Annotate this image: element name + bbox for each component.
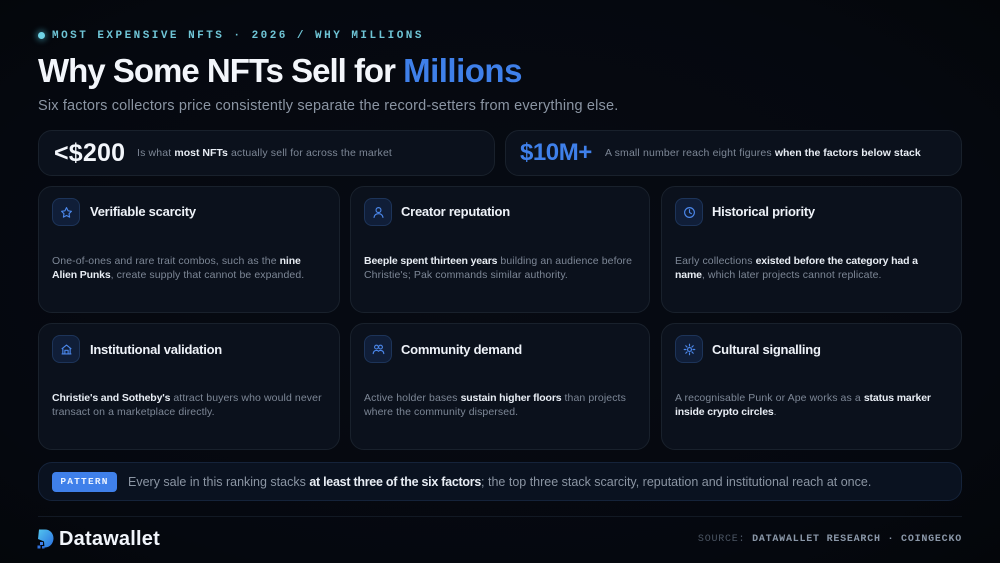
body text [675,255,918,281]
panel: historical priority [661,186,962,313]
pattern badge: PATTERN [60,476,109,487]
body text [52,392,322,418]
stat panel: ten million plus [505,130,962,176]
body text: inside crypto circles. [675,406,777,418]
icon: clock [675,198,703,226]
body text: A recognisable Punk or Ape works as a status marker [675,392,931,404]
body text: Alien Punks, create supply that cannot be expanded. [52,269,304,281]
stat panel: under 200 [38,130,495,176]
stat value: $10M+ [520,139,592,166]
icon: star [52,198,80,226]
heading: Cultural signalling [712,342,821,357]
icon: sun [675,335,703,363]
eyebrow dot [38,32,44,38]
title: Why Some NFTs Sell for Millions [38,52,522,89]
body text: name, which later projects cannot replicate. [675,269,882,281]
heading: Community demand [401,342,522,357]
eyebrow [33,27,424,44]
pattern badge [52,472,117,492]
icon: person [364,198,392,226]
footer divider [38,516,962,517]
wordmark: Datawallet [59,528,160,550]
body text: transact on a marketplace directly. [52,406,215,418]
body text [364,392,626,418]
body text: One-of-ones and rare trait combos, such as the nine [52,255,301,267]
panel: creator reputation [350,186,650,313]
pattern text: Every sale in this ranking stacks at least three of the six factors; the top three stack scarcity, reputation and institutional reach at once. [128,475,871,489]
body text [52,255,304,281]
heading: Verifiable scarcity [90,204,196,219]
body text: Christie's; Pak commands similar authority. [364,269,568,281]
body text: Beeple spent thirteen years building an audience before [364,255,632,267]
body text [675,392,931,418]
pattern bar [38,462,962,501]
heading: Creator reputation [401,204,510,219]
source: SOURCE: DATAWALLET RESEARCH · COINGECKO [698,534,962,545]
body text: Active holder bases sustain higher floors than projects [364,392,626,404]
panel: institutional validation [38,323,340,450]
icon: people [364,335,392,363]
body text: Christie's and Sotheby's attract buyers who would never [52,392,322,404]
body text: where the community dispersed. [364,406,518,418]
body text [364,255,632,281]
body text: Early collections existed before the category had a [675,255,918,267]
icon: institution [52,335,80,363]
stat description: Is what most NFTs actually sell for across the market [137,147,392,159]
heading: Historical priority [712,204,815,219]
subtitle: Six factors collectors price consistently separate the record-setters from everything else. [38,98,618,114]
heading: Institutional validation [90,342,222,357]
eyebrow text: MOST EXPENSIVE NFTS · 2026 / WHY MILLIONS [52,30,424,42]
panel: verifiable scarcity [38,186,340,313]
logo: Datawallet [38,528,160,550]
panel: cultural signalling [661,323,962,450]
stat value: <$200 [54,139,125,167]
stat description: A small number reach eight figures when the factors below stack [605,147,921,159]
icon: Datawallet mark [38,530,54,548]
panel: community demand [350,323,650,450]
